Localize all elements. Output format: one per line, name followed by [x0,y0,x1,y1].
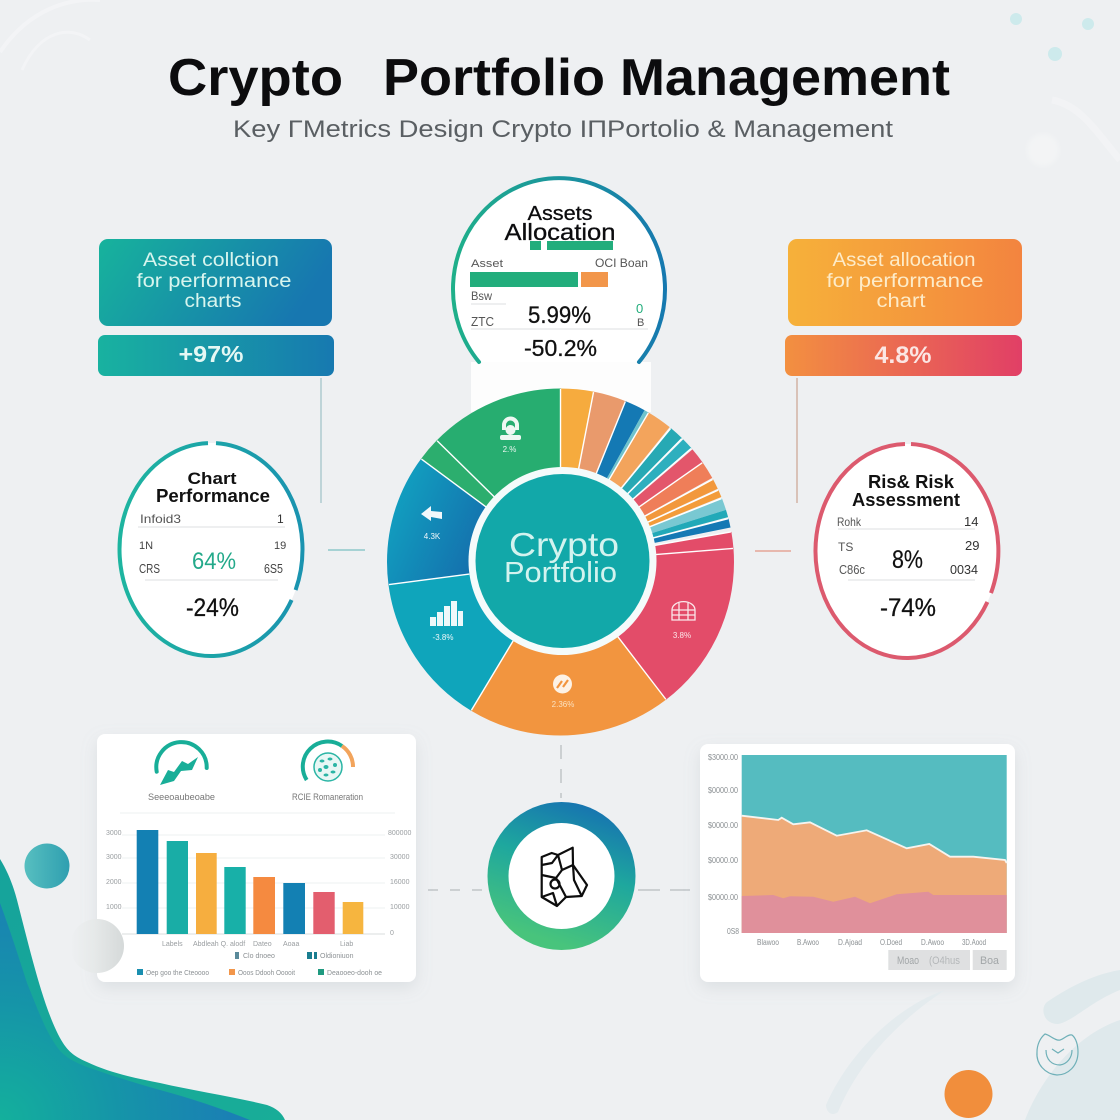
panel: risk assessment circle: 0034 [950,562,978,577]
decorative swooshes bottom right [826,970,1120,1120]
icon ring: center bottom [488,802,636,950]
pie slices [430,431,692,693]
decorative shapes top [0,0,1120,166]
allocation heading: Allocation [504,219,616,245]
legend: Ooos Ddooh Ooooit [238,970,295,977]
icon: bars [430,601,463,642]
legend: Clo dnoeo [243,953,275,960]
gauge: left [156,742,207,785]
panel: risk assessment circle: Assessment [852,490,960,510]
area chart axis labels: $0000.00 [708,786,738,795]
panel: asset allocation card [788,239,1022,326]
center hub [468,467,656,655]
area chart axis labels: O.Doed [880,938,902,947]
panel: risk assessment circle: C86c [839,562,865,577]
allocation bar [470,256,648,287]
title: Portfolio Management [383,49,950,107]
area chart axis labels: 3D.Aood [962,938,986,947]
axis labels: Dateo [253,941,272,948]
decorative wave bottom left [0,859,285,1120]
slice separators [389,389,733,710]
bar chart [122,830,385,934]
panel: risk assessment circle [815,444,998,658]
area chart [742,755,1007,933]
area chart axis labels: 0S8 [727,927,739,936]
area chart axis labels: B.Awoo [797,938,819,947]
center hub: Crypto [509,526,619,563]
icon: lock: 2.% [503,445,516,454]
panel: chart performance circle: 19 [274,540,286,552]
panel: chart performance circle [120,443,302,656]
pie chart: crypto portfolio [389,389,733,710]
panel: chart performance circle: 1 [277,512,284,526]
area chart axis labels: $0000.00 [708,821,738,830]
panel: asset collection card [99,239,332,326]
area chart axis labels: D.Awoo [921,938,944,947]
axis labels [106,830,411,948]
axis labels: 3000 [106,854,122,861]
area chart axis labels: $0000.00 [708,893,738,902]
panel: risk assessment circle: 8% [892,546,923,574]
center hub: Portfolio [504,557,617,589]
axis labels: 3000 [106,830,122,837]
axis labels: 10000 [390,904,410,911]
allocation metrics: ZTC [471,314,494,329]
panel: chart performance circle: Chart [188,469,237,488]
area chart axis labels: Blawoo [757,938,779,947]
axis labels: 16000 [390,879,410,886]
allocation bar: Asset [471,258,503,270]
legend: Deaooeo-dooh oe [327,970,382,977]
allocation metrics: 0 [636,301,643,316]
panel: chart performance circle: 1N [139,540,153,552]
panel: asset collection card: charts [184,291,242,312]
icon: bars: -3.8% [433,633,453,642]
panel: chart performance circle: CRS [139,561,160,576]
legend: Oep goo the Cteoooo [146,970,209,977]
decorative circle orange [944,1070,992,1118]
panel: chart performance circle: Infoid3 [140,512,181,526]
icon: building [672,602,695,640]
icon: coin [552,674,574,709]
gauge label: right: RCIE Romaneration [292,792,363,802]
panel: risk assessment circle: -74% [880,594,936,622]
area chart axis labels [708,753,986,947]
icon: building: 3.8% [673,631,691,640]
panel: asset collection card: for performance [136,271,292,292]
allocation metrics: -50.2% [524,335,597,361]
icon: coin: 2.36% [552,700,574,709]
area chart legend boxes [888,950,1007,970]
axis labels: Labels [162,941,183,948]
allocation metrics [471,289,648,361]
axis labels: Abdleah Q. alodf [193,941,245,948]
panel: asset allocation card: Asset allocation [832,250,976,271]
axis labels: 0 [390,930,394,937]
panel: risk assessment circle: Rohk [837,515,862,529]
allocation heading [504,203,616,250]
gauge label: left: Seeeoaubeoabe [148,792,215,802]
panel: bar chart card [97,734,416,982]
panel: left percent bar [98,335,334,376]
axis labels: 2000 [106,879,122,886]
panel: chart performance circle: -24% [186,594,239,622]
panel: risk assessment circle: TS [838,540,853,554]
panel: left percent bar: +97% [178,341,244,367]
subtitle: Key ΓMetrics Design Crypto ΙΠPortolio & Management [233,116,893,143]
panel: chart performance circle: 6S5 [264,561,283,576]
icon: outline cat logo [1037,1034,1078,1075]
panel: risk assessment circle: 29 [965,538,979,553]
area chart legend boxes: Moao [897,955,919,967]
icon: wallet cube [542,848,587,906]
allocation heading: Assets [528,203,592,225]
panel: chart performance circle: 64% [192,548,236,575]
icon: arrow: 4.3K [424,532,441,541]
area chart legend boxes: Boa [980,955,1000,967]
area chart axis labels: $3000.00 [708,753,738,762]
axis labels: Liab [340,941,353,948]
panel: area chart card [700,744,1015,982]
decorative circle grey [70,919,124,973]
panel: asset allocation card: for performance [826,271,984,292]
title [168,49,950,107]
panel: asset allocation card: chart [876,291,926,312]
axis labels: 30000 [390,854,410,861]
panel: risk assessment circle: 14 [964,514,978,529]
axis labels: Aoaa [283,941,299,948]
legend [137,952,382,977]
area chart axis labels: $0000.00 [708,856,738,865]
connector lines [321,378,797,890]
icon: lock [500,416,521,454]
panel: right percent bar: 4.8% [874,342,932,369]
decorative circle teal [24,844,70,888]
panel: right percent bar [785,335,1022,376]
panel: assets allocation circle [453,178,665,412]
panel: asset collection card: Asset collction [143,250,279,271]
area chart legend boxes: (O4hus [929,955,960,967]
allocation bar: OCI Boan [595,256,648,270]
panel: chart performance circle: Performance [156,486,270,506]
icon: arrow [421,506,442,541]
area chart axis labels: D.Ajoad [838,938,862,947]
allocation metrics: 5.99% [528,302,591,329]
axis labels: 1000 [106,904,122,911]
title: Crypto [168,49,343,107]
axis labels: 800000 [388,830,411,837]
allocation metrics: Bsw [471,289,492,303]
panel: risk assessment circle: Ris& Risk [868,472,955,492]
legend: Oldioniuon [320,953,354,960]
allocation metrics: B [637,317,644,329]
gauge: right [303,742,353,781]
